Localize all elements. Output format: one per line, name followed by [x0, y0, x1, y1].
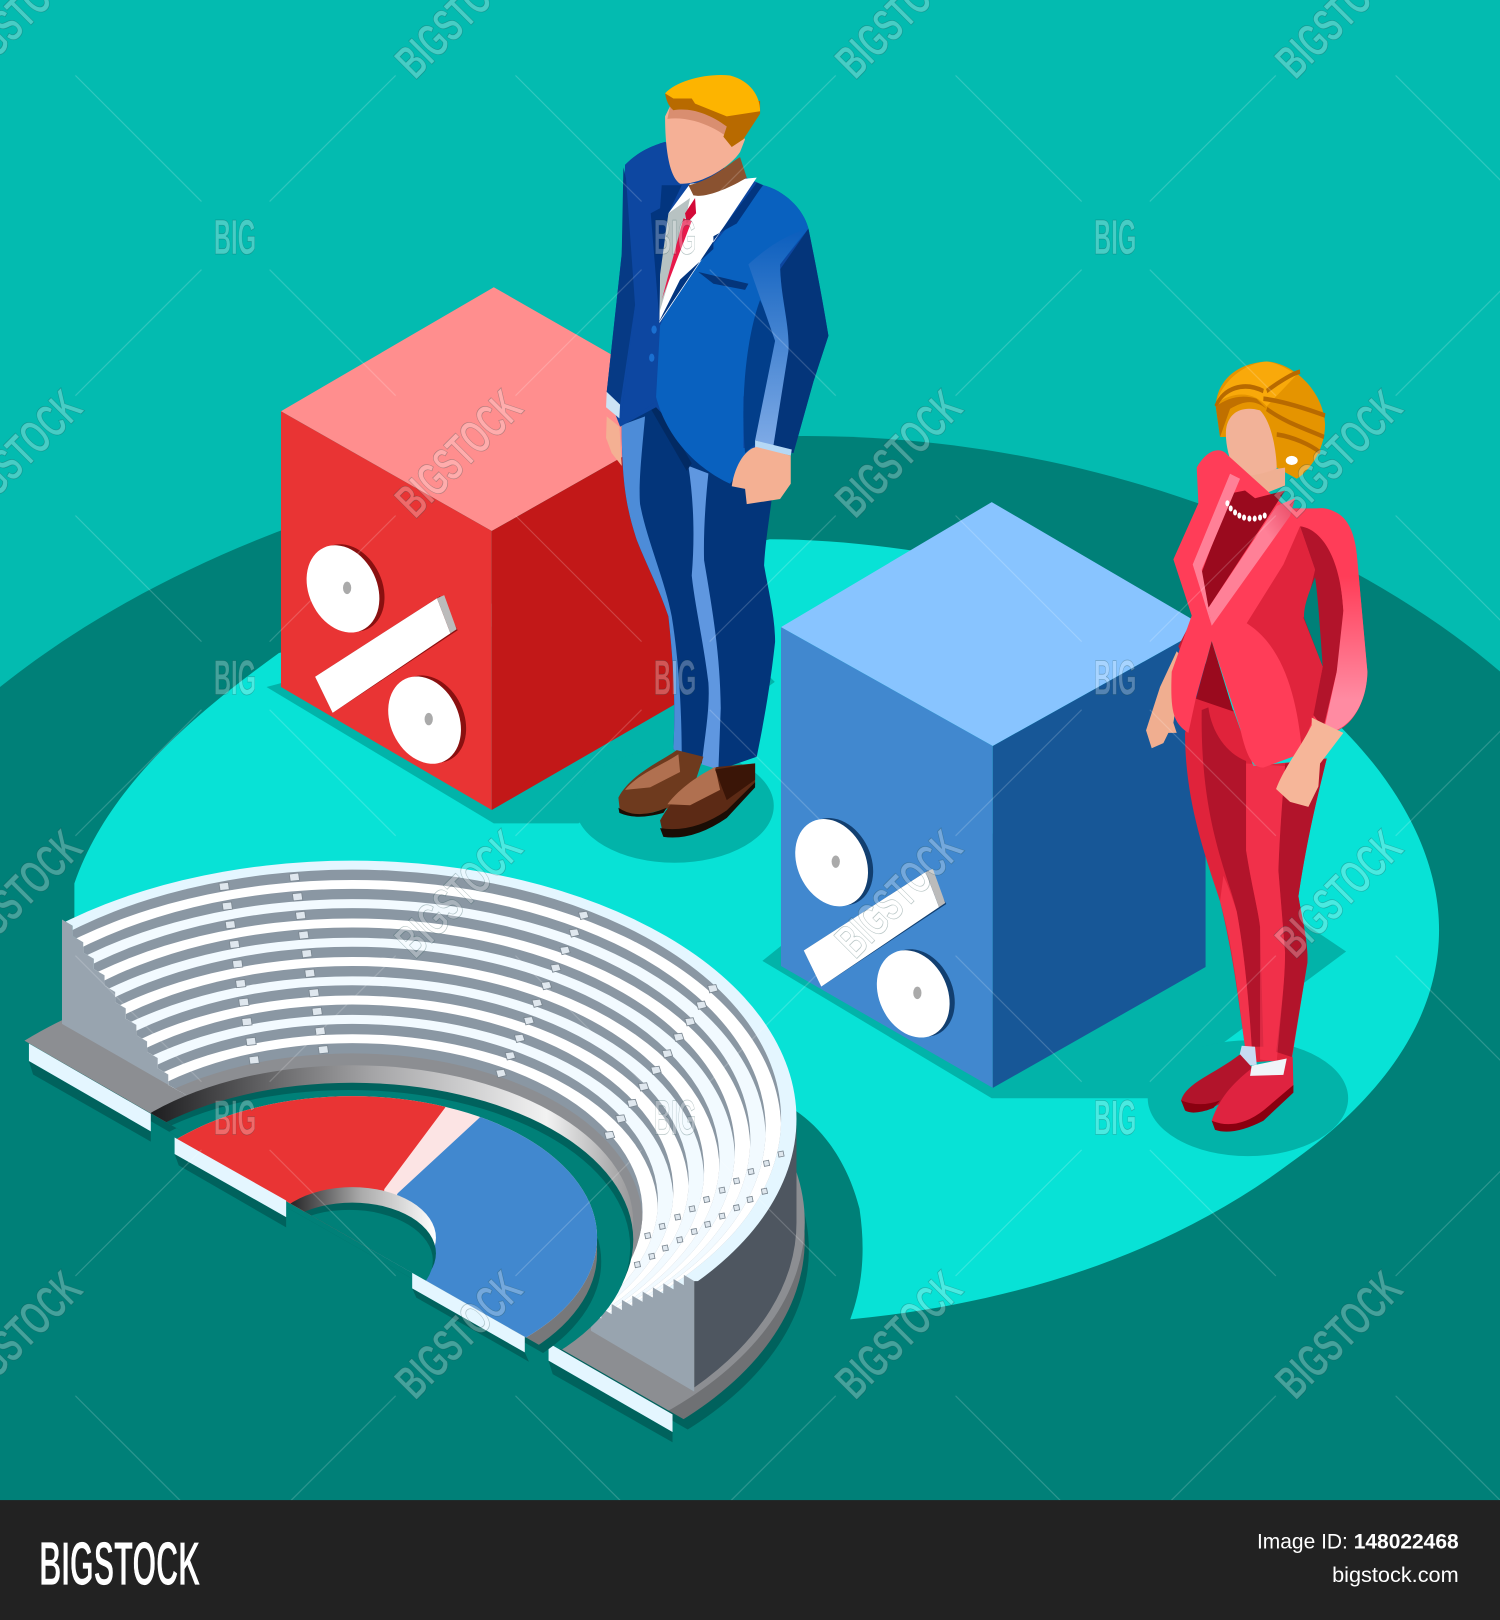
- woman shoes: [1181, 1046, 1293, 1132]
- man hands: [606, 416, 791, 504]
- footer image id: Image ID: 148022468: [1257, 1531, 1459, 1554]
- infographic canvas: BIG: [1094, 1089, 1136, 1145]
- blue box percent sign: [782, 806, 968, 1050]
- podium front edges: [175, 1138, 525, 1352]
- man trousers: [622, 397, 775, 769]
- footer banner: BIGSTOCK: [39, 1530, 201, 1599]
- watermark: repeated BIGSTOCK labels: BIGSTOCK: [1266, 380, 1413, 528]
- blue box faces: [781, 502, 1206, 1088]
- watermark: repeated BIG labels: BIG: [654, 1089, 696, 1145]
- woman blouse: [1202, 491, 1285, 608]
- infographic canvas: BIG: [1094, 209, 1136, 265]
- watermark: repeated BIG labels: [214, 209, 1136, 1145]
- seat share half-ring podium: [174, 1096, 602, 1362]
- watermark: repeated BIGSTOCK labels: BIGSTOCK: [386, 380, 533, 528]
- man shoes: [618, 750, 755, 837]
- woman pearl necklace: [1225, 500, 1267, 522]
- right stair end face: [591, 1275, 694, 1392]
- woman neck: [1245, 468, 1285, 498]
- podium ring with red, pale and blue sectors: [177, 1096, 598, 1345]
- watermark: repeated BIG labels: BIG: [654, 209, 696, 265]
- watermark: repeated BIGSTOCK labels: BIGSTOCK: [1266, 821, 1413, 968]
- woman face: [1226, 409, 1277, 475]
- shadow: red box and man: [267, 579, 775, 863]
- podium shadow: [174, 1154, 602, 1362]
- man hair: [665, 75, 760, 147]
- woman hair: [1216, 361, 1325, 479]
- man shirt and tie: [651, 178, 763, 323]
- woman left hand: [1146, 651, 1183, 748]
- infographic canvas: BIG: [1094, 649, 1136, 705]
- man face: [665, 106, 745, 184]
- man neck: [688, 157, 747, 196]
- seating rows: [66, 860, 796, 1318]
- watermark: repeated BIG labels: BIG: [654, 649, 696, 705]
- watermark: repeated BIGSTOCK labels: BIGSTOCK: [826, 821, 973, 968]
- aisle step marks: [219, 873, 784, 1268]
- woman earring: [1286, 456, 1298, 465]
- bright speech-bubble disc: [74, 539, 1439, 1319]
- watermark: repeated BIGSTOCK labels: BIGSTOCK: [386, 821, 533, 968]
- watermark: repeated BIG labels: BIG: [214, 649, 256, 705]
- woman lapels: [1193, 474, 1295, 626]
- outer dark wall: [694, 1119, 796, 1388]
- woman trousers: [1185, 697, 1327, 1062]
- watermark: repeated BIG labels: BIG: [214, 209, 256, 265]
- watermark: repeated BIGSTOCK labels: BIGSTOCK: [386, 1262, 533, 1409]
- watermark: repeated BIGSTOCK labels: BIGSTOCK: [826, 380, 973, 528]
- blue percent box: [781, 502, 1206, 1088]
- footer site address: bigstock.com: [1332, 1562, 1459, 1587]
- woman right hand: [1276, 718, 1343, 807]
- amphitheatre drop shadow: [29, 1056, 809, 1442]
- man jacket: [606, 142, 828, 484]
- dark teal disc: [0, 436, 1500, 1500]
- footer banner: [0, 1500, 1500, 1620]
- watermark: repeated BIGSTOCK labels: BIGSTOCK: [826, 1262, 973, 1409]
- woman in red suit: [1146, 361, 1367, 1132]
- inner gradient wall and floor: [150, 1066, 634, 1350]
- base front edges: [29, 1043, 673, 1432]
- woman jacket: [1171, 450, 1367, 768]
- red percent box: [281, 287, 707, 810]
- shadow: blue box and woman: [762, 827, 1348, 1156]
- left stair end face: [62, 920, 168, 1085]
- watermark: repeated BIGSTOCK labels: BIGSTOCK: [1266, 1262, 1413, 1409]
- parliament amphitheatre: [24, 860, 809, 1442]
- red box faces: [281, 287, 707, 810]
- red box percent sign: [293, 532, 480, 776]
- watermark: repeated BIG labels: BIG: [214, 1089, 256, 1145]
- amphitheatre base ring: [24, 1020, 805, 1419]
- man in blue suit: [606, 75, 828, 837]
